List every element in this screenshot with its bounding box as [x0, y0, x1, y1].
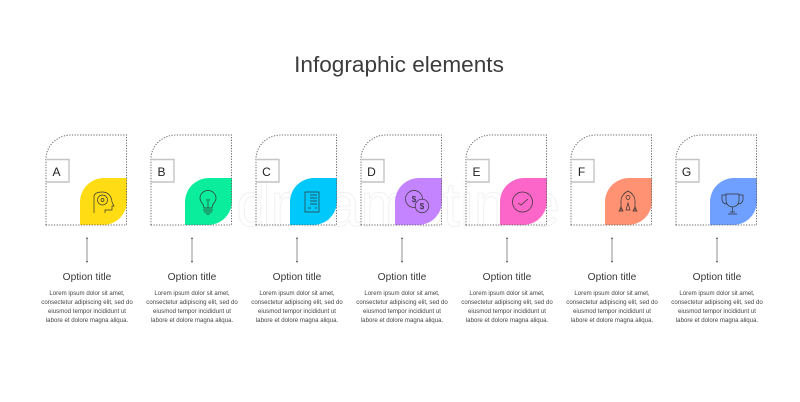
option C text	[251, 272, 343, 324]
icon: coins: $	[412, 195, 417, 204]
option G text: eiusmod tempor incididunt ut	[678, 308, 756, 315]
option C text: consectetur adipiscing elit, sed do	[251, 299, 343, 306]
option E text: eiusmod tempor incididunt ut	[468, 308, 546, 315]
card G: G	[682, 165, 691, 179]
option D text: Option title	[378, 272, 426, 282]
card C	[256, 135, 337, 263]
option G text: Option title	[693, 272, 741, 282]
card A: A	[52, 165, 61, 179]
card B	[151, 135, 232, 263]
option B text: Lorem ipsum dolor sit amet,	[154, 290, 230, 297]
icon: rocket	[619, 191, 637, 211]
option B text: consectetur adipiscing elit, sed do	[146, 299, 238, 306]
option C text: labore et dolore magna aliqua.	[256, 317, 338, 324]
option C text: Lorem ipsum dolor sit amet,	[259, 290, 335, 297]
option C text: Option title	[273, 272, 321, 282]
option A text: labore et dolore magna aliqua.	[46, 317, 128, 324]
option A text: Lorem ipsum dolor sit amet,	[49, 290, 125, 297]
option D text: labore et dolore magna aliqua.	[361, 317, 443, 324]
option E text	[461, 272, 553, 324]
icon: trophy	[722, 194, 743, 214]
option F text: consectetur adipiscing elit, sed do	[566, 299, 658, 306]
icon: head with gear	[94, 192, 114, 213]
icon: light bulb	[200, 191, 216, 214]
option F text: Option title	[588, 272, 636, 282]
option F text: eiusmod tempor incididunt ut	[573, 308, 651, 315]
title: Infographic elements	[294, 52, 504, 77]
card B: B	[157, 165, 166, 179]
option B text: Option title	[168, 272, 216, 282]
option G text: consectetur adipiscing elit, sed do	[671, 299, 763, 306]
option A text	[41, 272, 133, 324]
card C: C	[262, 165, 271, 179]
card A	[46, 135, 127, 263]
icon: coins: $	[420, 202, 425, 211]
option D text: consectetur adipiscing elit, sed do	[356, 299, 448, 306]
option B text: labore et dolore magna aliqua.	[151, 317, 233, 324]
option F text: Lorem ipsum dolor sit amet,	[574, 290, 650, 297]
option G text: Lorem ipsum dolor sit amet,	[679, 290, 755, 297]
option F text	[566, 272, 658, 324]
watermark: dreamstime	[236, 171, 560, 240]
option B text: eiusmod tempor incididunt ut	[153, 308, 231, 315]
option F text: labore et dolore magna aliqua.	[571, 317, 653, 324]
option D text	[356, 272, 448, 324]
option E text: Lorem ipsum dolor sit amet,	[469, 290, 545, 297]
option A text: Option title	[63, 272, 111, 282]
card E	[466, 135, 547, 263]
option B text	[146, 272, 238, 324]
option E text: consectetur adipiscing elit, sed do	[461, 299, 553, 306]
icon: document	[305, 192, 319, 212]
card D	[361, 135, 442, 263]
option A text: eiusmod tempor incididunt ut	[48, 308, 126, 315]
option G text: labore et dolore magna aliqua.	[676, 317, 758, 324]
card D: D	[367, 165, 376, 179]
option A text: consectetur adipiscing elit, sed do	[41, 299, 133, 306]
icon: coins	[406, 190, 429, 213]
icon: clock	[512, 192, 532, 212]
option E text: labore et dolore magna aliqua.	[466, 317, 548, 324]
option G text	[671, 272, 763, 324]
option C text: eiusmod tempor incididunt ut	[258, 308, 336, 315]
card F: F	[578, 165, 585, 179]
option D text: Lorem ipsum dolor sit amet,	[364, 290, 440, 297]
card F	[571, 135, 652, 263]
card E: E	[472, 165, 481, 179]
option D text: eiusmod tempor incididunt ut	[363, 308, 441, 315]
card G	[676, 135, 757, 263]
option E text: Option title	[483, 272, 531, 282]
